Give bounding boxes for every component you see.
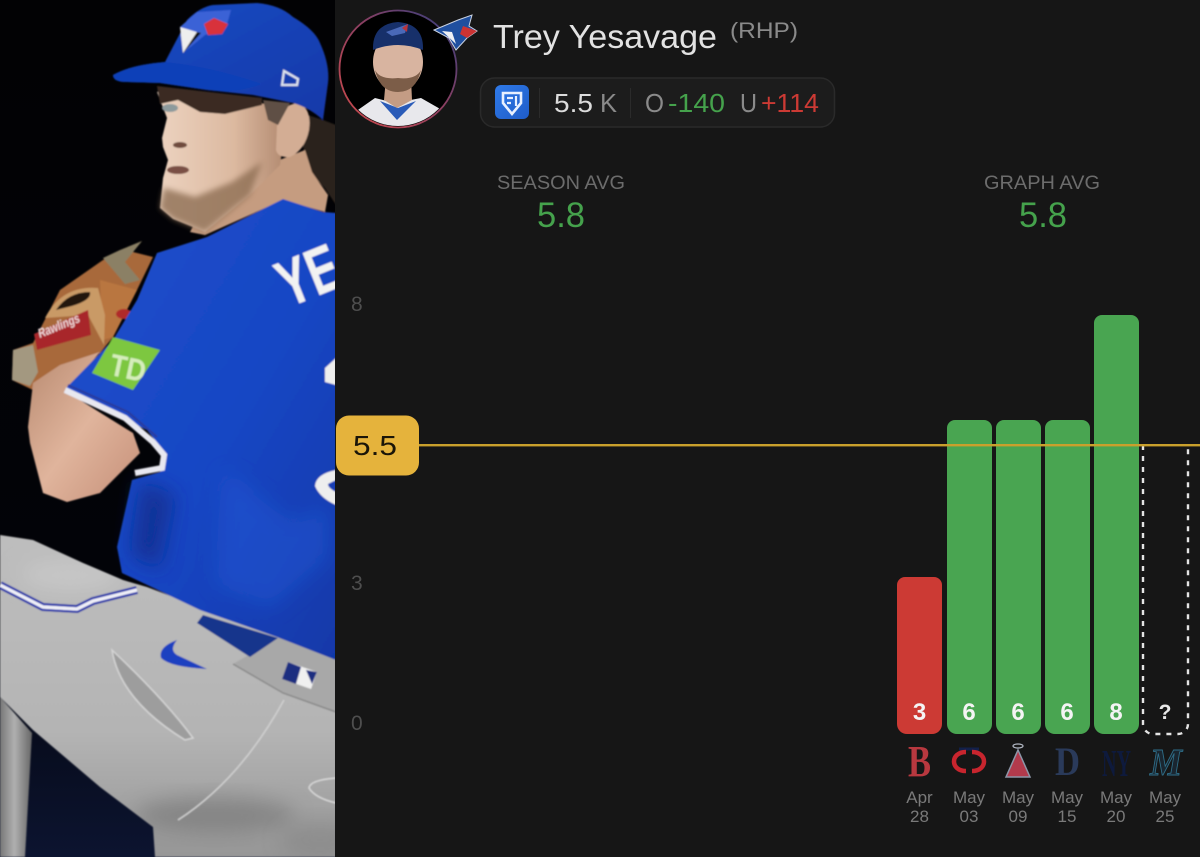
photo: eye socket shadow [157, 86, 262, 114]
photo: hair near ear [263, 100, 290, 125]
game date labels: May [953, 788, 986, 807]
photo: mouth [167, 166, 189, 174]
game date labels: 25 [1156, 807, 1174, 826]
stat: season average: 5.8 [537, 196, 585, 235]
over odds: O [645, 88, 664, 118]
photo: cap [113, 3, 328, 120]
odds pill: +114 [761, 88, 819, 118]
icon: cap logo [180, 10, 231, 53]
photo: eye [162, 104, 178, 112]
odds pill [480, 78, 834, 127]
icon: MLB logo [282, 662, 317, 689]
jersey name lettering: YE [266, 229, 351, 321]
bar: May 20, 8 strikeouts [1094, 315, 1139, 734]
photo: nostril [173, 142, 187, 148]
photo: neck [190, 150, 328, 235]
photo: waistband [233, 637, 336, 712]
y axis labels: 0 [351, 712, 363, 735]
icon: glove brand circle [116, 309, 132, 319]
game date labels: May [1002, 788, 1035, 807]
prop line: 5.5 [554, 88, 593, 118]
jersey sleeve piping [65, 390, 164, 473]
bar: May 09, 6 strikeouts: 6 [1011, 699, 1025, 726]
icon: Marlins: M [1149, 742, 1183, 784]
handedness label: (RHP) [730, 18, 798, 43]
icon: Rawlings patch: Rawlings [36, 310, 82, 341]
bar: Apr 28, 3 strikeouts: 3 [913, 699, 926, 726]
player name: Trey Yesavage [493, 18, 717, 55]
icon: Red Sox: B [908, 737, 931, 786]
game date labels: 09 [1009, 807, 1027, 826]
game date labels: Apr [906, 788, 933, 807]
game date labels: 15 [1058, 807, 1076, 826]
photo: pants [0, 535, 360, 857]
photo: lower leg [0, 697, 32, 857]
icon: Rawlings patch [34, 310, 91, 350]
bar: May 25, upcoming game: ? [1159, 701, 1171, 724]
odds pill: K [600, 88, 618, 118]
photo: hair [302, 114, 335, 204]
icon: Yankees: NY [1102, 743, 1131, 785]
odds pill: -140 [668, 88, 725, 118]
bar chart [897, 315, 1188, 734]
prop line at 5.5 [415, 444, 1200, 446]
stat: graph average [984, 173, 1100, 235]
photo: belt [197, 615, 278, 657]
photo: ear [276, 103, 310, 157]
bar: May 03, 6 strikeouts [947, 420, 992, 734]
game date labels: 28 [910, 807, 929, 826]
stat: graph average: GRAPH AVG [984, 173, 1100, 194]
prop line badge: 5.5 [353, 430, 397, 461]
icon: Twins [954, 749, 984, 771]
bar: May 15, 6 strikeouts [1045, 420, 1090, 734]
icon: Nike swoosh [161, 640, 207, 669]
photo: jersey [65, 199, 351, 660]
y axis labels: 8 [351, 293, 363, 316]
icon: New Era mark [282, 71, 298, 85]
stat: graph average: 5.8 [1019, 196, 1067, 235]
icon: TD sleeve patch [92, 337, 160, 390]
prop line badge [336, 416, 419, 476]
under odds: U [740, 88, 757, 118]
photo: glove [12, 241, 153, 390]
photo: face [157, 92, 285, 232]
icon: TD sleeve patch: TD [107, 347, 149, 389]
bar: May 20, 8 strikeouts: 8 [1109, 699, 1123, 726]
opponent logos [908, 737, 1183, 786]
stat: season average [497, 173, 625, 235]
game date labels: May [1149, 788, 1182, 807]
bar: May 15, 6 strikeouts: 6 [1060, 699, 1074, 726]
game date labels: 03 [960, 807, 978, 826]
game date labels: May [1100, 788, 1133, 807]
player headshot [340, 10, 456, 135]
game date labels: 20 [1107, 807, 1125, 826]
stat: season average: SEASON AVG [497, 173, 625, 194]
game date labels [906, 788, 1182, 826]
bar: May 09, 6 strikeouts [996, 420, 1041, 734]
photo: forearm [28, 352, 140, 502]
icon: Angels [1006, 744, 1030, 777]
bar: Apr 28, 3 strikeouts [897, 577, 942, 734]
photo: pitcher in Blue Jays uniform [0, 0, 360, 857]
icon: Tigers: D [1055, 739, 1080, 784]
y axis labels [351, 293, 363, 735]
bar: May 03, 6 strikeouts: 6 [962, 699, 976, 726]
game date labels: May [1051, 788, 1084, 807]
icon: Blue Jays team logo [434, 15, 477, 50]
icon: FanDuel logo [495, 85, 529, 119]
chart panel background [335, 0, 1200, 857]
photo: pocket [112, 650, 193, 740]
photo: beard [160, 162, 262, 232]
bar: May 25, upcoming game [1143, 445, 1188, 734]
y axis labels: 3 [351, 572, 363, 595]
